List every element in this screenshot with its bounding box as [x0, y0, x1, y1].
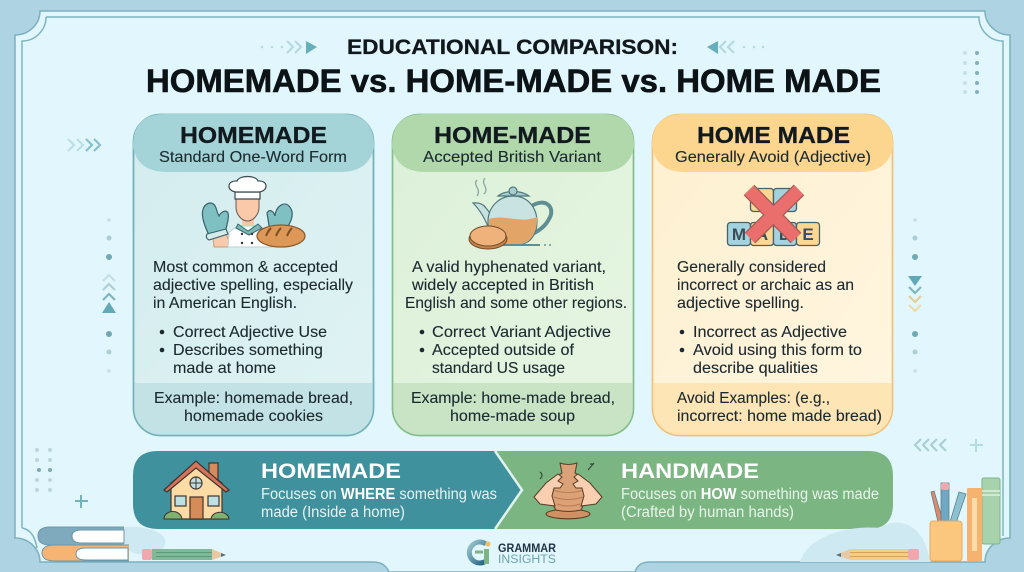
illustration: pencil cup [930, 483, 966, 561]
body text: incorrect or archaic as an [677, 277, 854, 294]
icon: crossed out letter blocks: E [802, 225, 814, 244]
subheading: Standard One-Word Form [159, 149, 347, 166]
subheading: Accepted British Variant [423, 149, 602, 166]
title: educational comparison: EDUCATIONAL COMPARISON: [347, 36, 678, 59]
icon: teapot and biscuit [469, 178, 551, 249]
decoration: left chevrons dark [86, 139, 100, 151]
description: where: made (Inside a home) [261, 504, 405, 521]
body text: Generally considered [677, 259, 826, 276]
logo: grammar insights: INSIGHTS [498, 554, 556, 566]
example: home-made soup [450, 408, 575, 425]
example: Example: home-made bread, [411, 390, 615, 407]
heading: homemade: HOMEMADE [261, 460, 401, 483]
body text: in American English. [153, 295, 297, 312]
illustration: yellow pencil [836, 549, 919, 560]
body text [153, 259, 353, 312]
logo: grammar insights [469, 541, 557, 566]
example [411, 390, 615, 425]
body text [677, 259, 854, 312]
bullet list: Accepted outside of [432, 342, 575, 359]
panel: home-made [392, 114, 634, 436]
body text: English and some other regions. [405, 295, 627, 312]
description: where: Focuses on WHERE something was [261, 486, 497, 503]
illustration: green pencil [142, 549, 226, 560]
illustration: standing books [967, 478, 1000, 561]
bullet list: Correct Adjective Use [173, 324, 327, 341]
decoration: left column [102, 218, 116, 373]
example: homemade cookies [184, 408, 323, 425]
bullet list [680, 324, 862, 377]
panel: home made [652, 114, 893, 436]
bullet list: Correct Variant Adjective [432, 324, 611, 341]
decoration: bottom left dots [35, 448, 52, 492]
icon: hands shaping a pot [534, 463, 602, 519]
bullet list: Describes something [173, 342, 323, 359]
example: incorrect: home made bread) [677, 408, 882, 425]
description: how [621, 486, 879, 521]
decoration: plus left [75, 495, 88, 508]
decoration: top left arrows [261, 41, 317, 54]
decoration: top right dots [963, 51, 979, 94]
example: Avoid Examples: (e.g., [677, 390, 830, 407]
icon: crossed out letter blocks: D [779, 225, 791, 244]
bullet list [420, 324, 611, 377]
example [677, 390, 882, 425]
body text: adjective spelling. [677, 295, 804, 312]
subheading: Generally Avoid (Adjective) [675, 149, 871, 166]
decoration: left chevrons [68, 139, 83, 151]
illustration: cloud right [800, 523, 930, 562]
example [154, 390, 353, 425]
description: how: Focuses on HOW something was made [621, 486, 879, 503]
illustration: stacked books [38, 527, 165, 561]
icon: chef with mitts and bread [202, 176, 305, 247]
body text: widely accepted in British [411, 277, 594, 294]
icon: crossed out letter blocks [728, 188, 820, 246]
decoration: bottom right chevrons [915, 439, 946, 451]
bullet list: Incorrect as Adjective [693, 324, 847, 341]
icon: house [164, 461, 229, 519]
description: how: (Crafted by human hands) [621, 504, 794, 521]
body text [405, 259, 627, 312]
bullet list: standard US usage [432, 360, 565, 377]
body text: A valid hyphenated variant, [412, 259, 606, 276]
logo: grammar insights: GRAMMAR [498, 543, 557, 555]
bullet list [160, 324, 327, 377]
example: Example: homemade bread, [154, 390, 353, 407]
heading: handmade: HANDMADE [621, 460, 759, 483]
bullet list: Avoid using this form to [693, 342, 862, 359]
banner: homemade vs handmade [133, 451, 893, 529]
bullet list: made at home [173, 360, 276, 377]
heading: homemade: HOMEMADE [180, 122, 327, 148]
decoration: plus right [970, 439, 983, 452]
panel: homemade [133, 114, 374, 436]
icon: crossed out letter blocks: A [756, 225, 768, 244]
decoration: right column [908, 218, 922, 373]
icon: crossed out letter blocks: M [732, 225, 746, 244]
description: where [261, 486, 497, 521]
main title: HOMEMADE vs. HOME-MADE vs. HOME MADE [146, 63, 881, 99]
body text: adjective spelling, especially [153, 277, 353, 294]
decoration: top right arrows [707, 41, 764, 54]
body text: Most common & accepted [153, 259, 338, 276]
bullet list: describe qualities [693, 360, 818, 377]
heading: home-made: HOME-MADE [434, 122, 591, 148]
heading: home made: HOME MADE [697, 122, 850, 148]
